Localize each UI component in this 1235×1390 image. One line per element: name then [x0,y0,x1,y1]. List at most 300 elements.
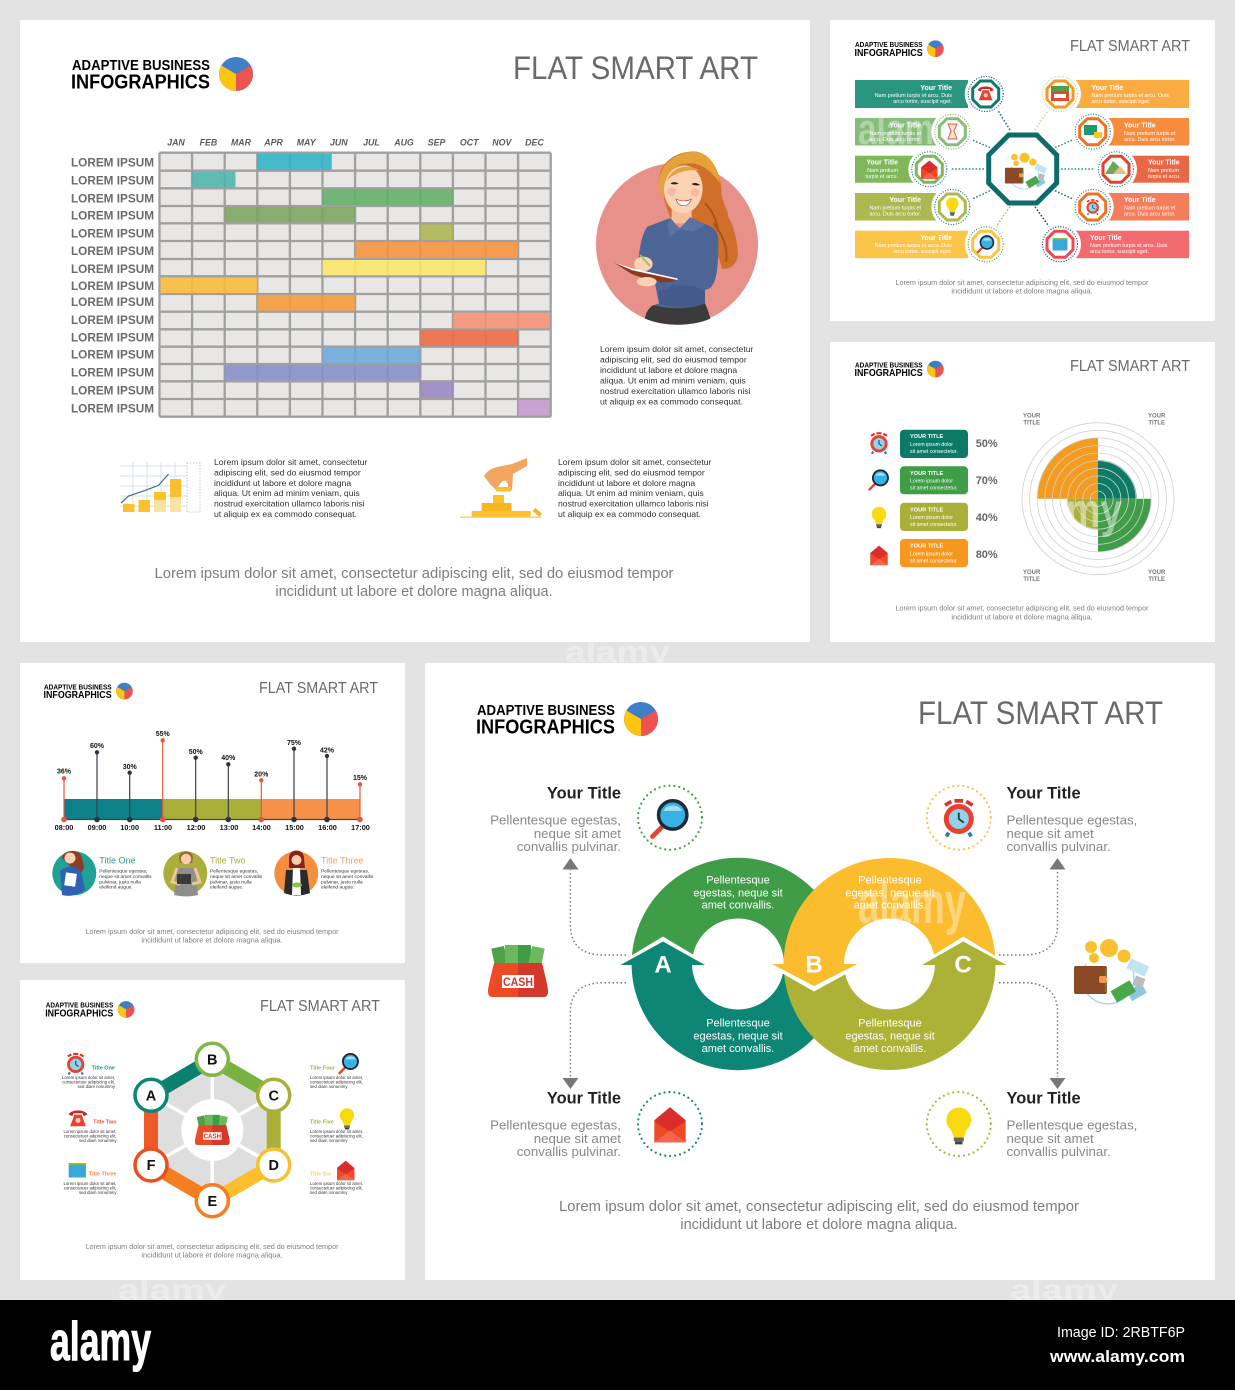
footer text: incididunt ut labore et dolore magna aliqua. [680,1217,958,1233]
bar labels left: Nam pretium turpis et [869,206,921,212]
top right callout: neque sit amet [1006,826,1094,841]
radial labels: YOUR [1023,414,1041,420]
text block: coins paragraph: ut aliquip ex ea commodo consequat. [558,509,701,519]
panel: timeline slide [20,663,405,963]
text block: chart paragraph: nostrud exercitation ullamco laboris nisi [214,498,365,508]
ring text: amet convallis. [854,1043,926,1055]
node letters: B [207,1052,218,1068]
person two text: Pellentesque egestas, [210,868,258,874]
percentages: 70% [976,475,998,487]
text block: right paragraph: incididunt ut labore et dolore magna [600,365,737,375]
title bars right [1076,80,1189,258]
ring text: egestas, neque sit [845,887,935,899]
heading: FLAT SMART ART [259,680,378,697]
bar labels right: arcu tortor, suscipit eget. [1092,99,1150,105]
top right callout [1006,784,1137,854]
bottom right callout: neque sit amet [1006,1131,1094,1146]
right column text: sed diam nonummy [310,1190,348,1195]
left column text: sed diam nonummy [79,1138,117,1143]
text block: coins paragraph: Lorem ipsum dolor sit amet, consectetur [558,457,712,467]
text block: right paragraph: Lorem ipsum dolor sit amet, consectetur [600,344,754,354]
ring text: amet convallis. [702,900,774,912]
radial labels: TITLE [1023,577,1040,583]
text block: coins paragraph: incididunt ut labore et dolore magna [558,478,695,488]
bar labels left: arcu tortor, suscipit eget. [893,99,952,105]
text block: coins paragraph: aliqua. Ut enim ad minim veniam, quis [558,488,704,498]
time labels: 09:00 [88,823,106,832]
logo [45,1001,134,1020]
percent labels: 36% [57,768,72,776]
bottom left callout: convallis pulvinar. [517,1144,621,1159]
background watermarks: alamy [565,636,670,669]
arrow letters: B [805,952,823,978]
website: www.alamy.com [1049,1347,1185,1366]
left column text: Lorem ipsum dolor sit amet, [63,1129,116,1134]
text block: right paragraph [600,344,754,406]
bar labels right: Your Title [1090,235,1122,242]
left column text: sed diam nonummy [78,1084,116,1089]
top right callout: Pellentesque egestas, [1006,812,1137,828]
right column icons [337,1054,358,1180]
month labels: MAY [297,138,317,148]
bottom right callout: convallis pulvinar. [1006,1144,1111,1159]
bar labels right: Nam pretium turpis et [1124,131,1176,137]
ring text: amet convallis. [854,900,926,912]
percent labels: 42% [320,748,335,754]
illustration: woman with notebook [596,151,758,325]
legend text: YOUR TITLE [910,434,944,440]
gantt grid [160,153,551,417]
person three text: Title Three [321,855,364,865]
right column text: Title Five [310,1120,334,1126]
row labels: LOREM IPSUM [71,226,154,240]
month labels: JAN [167,138,185,148]
text block: right paragraph: aliqua. Ut enim ad minim veniam, quis [600,376,746,386]
legend text: sit amet consectetur. [910,558,958,564]
left column text: Title Two [93,1120,117,1126]
row labels: LOREM IPSUM [71,279,154,293]
bar labels right: arcu. Duis arcu tortor. [1124,137,1176,143]
top left callout: convallis pulvinar. [517,839,621,854]
logo: ADAPTIVE BUSINESS [477,702,615,719]
month labels: OCT [460,138,479,148]
time labels: 12:00 [187,823,205,832]
bar labels left: arcu. Duis arcu tortor. [869,137,921,143]
footer text [86,927,339,944]
footer text [154,566,674,600]
footer text [896,278,1149,296]
text block: chart paragraph: adipiscing elit, sed do eiusmod tempor [214,467,361,477]
time labels [55,823,370,832]
background watermarks: alamy [1010,1274,1118,1307]
percent labels: 30% [123,764,137,771]
node letters: F [147,1158,156,1174]
text block: chart paragraph: incididunt ut labore et dolore magna [214,478,351,488]
percent labels: 20% [254,772,269,778]
bar labels left: Your Title [889,122,921,130]
bar labels right: Nam pretium turpis et [1124,206,1176,212]
footer text: incididunt ut labore et dolore magna aliqua. [275,584,553,600]
radial labels [1023,414,1166,583]
logo [855,360,944,379]
logo: INFOGRAPHICS [44,690,112,701]
node icons left [908,73,1007,265]
time labels: 10:00 [120,823,139,832]
panel: hexagon slide [20,980,405,1280]
bar labels right: Your Title [1124,197,1156,204]
person one text: Pellentesque egestas, [99,868,147,874]
panel: Gantt chart slide [20,20,810,642]
ring text: egestas, neque sit [693,887,783,899]
right column text: Lorem ipsum dolor sit amet, [310,1181,363,1186]
top left callout: Your Title [547,784,621,802]
bar labels left: turpis et arcu. [865,174,898,180]
arrow letters: C [954,952,972,978]
month labels: FEB [200,138,218,148]
radial labels: YOUR [1023,570,1041,576]
person three text: Pellentesque egestas, [321,868,369,874]
top right callout: Your Title [1006,784,1081,802]
alamy logo: alamy [50,1310,151,1372]
percentages: 40% [976,512,998,524]
footer text: Lorem ipsum dolor sit amet, consectetur adipiscing elit, sed do eiusmod tempor [559,1199,1079,1215]
month labels: NOV [492,138,512,148]
right column text: consectetuer adipiscing elit, [310,1134,363,1138]
footer text: Lorem ipsum dolor sit amet, consectetur adipiscing elit, sed do eiusmod tempor [86,927,339,936]
row labels: LOREM IPSUM [71,173,154,187]
row labels: LOREM IPSUM [71,402,154,416]
radial chart [1022,423,1174,575]
footer band [0,1300,1235,1390]
person two text: neque sit amet convallis [210,874,263,880]
ring text: egestas, neque sit [845,1031,935,1043]
time labels: 11:00 [154,823,172,832]
legend text: sit amet consectetur. [910,449,958,455]
footer text: Lorem ipsum dolor sit amet, consectetur adipiscing elit, sed do eiusmod tempor [896,604,1149,612]
person one text [99,855,152,890]
panel: hub and spoke slide [830,20,1215,321]
heading: FLAT SMART ART [260,998,380,1015]
percent labels: 15% [353,775,368,782]
bar labels right: turpis et arcu. [1148,174,1181,180]
bottom left callout: Your Title [547,1090,621,1108]
row labels: LOREM IPSUM [71,366,154,380]
footer text: incididunt ut labore et dolore magna aliqua. [951,612,1093,622]
footer text: Lorem ipsum dolor sit amet, consectetur adipiscing elit, sed do eiusmod tempor [86,1242,339,1251]
logo: INFOGRAPHICS [476,716,615,738]
bar labels left: Your Title [889,197,921,204]
logo: ADAPTIVE BUSINESS [46,1001,113,1010]
background watermarks: alamy [118,1274,226,1307]
node letters: A [146,1088,157,1104]
month labels: JUL [363,138,380,148]
bar labels right [1090,85,1181,255]
person two text: Title Two [210,855,246,865]
time labels: 08:00 [55,823,73,832]
icon: envelope in dotted circle [638,1092,702,1156]
row labels [71,156,154,416]
icon: cash bag: CASH [503,975,533,989]
logo [71,57,253,94]
logo: INFOGRAPHICS [45,1009,114,1020]
percent labels: 60% [90,743,105,750]
month labels: SEP [428,138,446,148]
left column text: Title Three [89,1172,116,1178]
bottom right callout [1006,1090,1137,1159]
time labels: 15:00 [285,823,304,832]
legend text: Lorem ipsum dolor [910,515,953,521]
bar labels left: Your Title [866,160,898,166]
ring text [693,874,935,1055]
logo: INFOGRAPHICS [855,48,923,59]
heading: FLAT SMART ART [1070,358,1190,375]
bar labels left: Nam pretium turpis et [869,131,921,137]
bottom left callout [490,1090,621,1159]
legend text: YOUR TITLE [910,544,944,550]
left column text: sed diam nonummy [79,1190,117,1195]
logo: ADAPTIVE BUSINESS [72,57,210,74]
person two text [210,855,263,890]
person two text: eleifend augue. [210,884,243,890]
person one text: eleifend augue. [99,884,133,890]
person three text [321,855,374,890]
percentages [976,438,998,561]
bar labels left [865,85,952,255]
icon: hand placing coins [460,458,542,518]
ring text: Pellentesque [858,874,922,886]
logo [855,40,944,59]
connector lines [950,109,1096,228]
bottom right callout: Pellentesque egestas, [1006,1118,1137,1132]
background watermarks [118,636,1118,1307]
month labels: JUN [330,138,348,148]
footer text [86,1242,339,1260]
radial labels: TITLE [1148,577,1165,583]
icon: magnifier in dotted circle [638,786,702,850]
person three text: neque sit amet convallis [321,874,374,880]
bar labels right: Your Title [1092,85,1123,92]
icon: cash bag [195,1115,230,1145]
right column text: Title Six [310,1172,332,1178]
person one text: Title One [99,855,135,865]
percent labels: 75% [287,740,302,747]
bar labels left: Nam pretium [867,168,899,174]
top left callout [490,784,621,854]
node letters: E [207,1194,217,1210]
icon: cash bag: CASH [204,1134,221,1141]
row labels: LOREM IPSUM [71,384,154,398]
footer text [559,1199,1079,1233]
watermark: alam [858,105,934,154]
left column text [62,1066,117,1195]
bottom right callout: Your Title [1006,1090,1081,1108]
bar labels right: arcu. Duis arcu tortor. [1124,212,1176,218]
right column text [310,1066,363,1195]
image id: Image ID: 2RBTF6P [1057,1324,1185,1341]
row labels: LOREM IPSUM [71,208,154,222]
right column text: Title Four [310,1066,336,1072]
radial labels: YOUR [1148,414,1166,420]
legend boxes [900,430,968,567]
legend text: YOUR TITLE [910,507,944,513]
left column text: Lorem ipsum dolor sit amet, [63,1181,116,1186]
percent labels: 50% [189,749,203,756]
legend text: Lorem ipsum dolor [910,478,953,484]
row labels: LOREM IPSUM [71,156,154,170]
legend text: sit amet consectetur. [910,522,958,528]
right column text: sed diam nonummy [310,1084,348,1089]
node letters: C [268,1088,279,1104]
right column text: sed diam nonummy [310,1138,348,1143]
bar labels right: Your Title [1124,122,1156,130]
legend text: Lorem ipsum dolor [910,442,953,448]
text block: right paragraph: nostrud exercitation ullamco laboris nisi [600,386,751,396]
logo: ADAPTIVE BUSINESS [855,40,923,49]
icon: wallet with coins [1074,939,1149,1004]
bar labels right: Nam pretium turpis et arcu. Duis [1090,243,1168,249]
person three [274,850,318,896]
month labels: DEC [525,138,544,148]
node letters: D [268,1158,279,1174]
logo: ADAPTIVE BUSINESS [44,682,112,691]
person three text: pulvinar, justo nulla [321,879,363,885]
text block: chart paragraph [214,457,368,519]
text block: chart paragraph: aliqua. Ut enim ad minim veniam, quis [214,488,360,498]
time labels: 16:00 [318,823,337,832]
footer text: incididunt ut labore et dolore magna aliqua. [141,936,283,944]
node icons right [1039,73,1137,265]
footer text [896,604,1149,622]
percent labels: 55% [156,731,170,738]
text block: right paragraph: ut aliquip ex ea commodo consequat. [600,396,743,406]
text block: right paragraph: adipiscing elit, sed do eiusmod tempor [600,354,747,364]
icon: growth bar chart [120,462,200,512]
row labels: LOREM IPSUM [71,331,154,345]
row labels: LOREM IPSUM [71,262,154,276]
left column text: Title One [92,1066,115,1072]
logo: INFOGRAPHICS [71,72,210,94]
row labels: LOREM IPSUM [71,313,154,327]
percent labels: 40% [221,755,236,762]
time labels: 17:00 [351,823,370,832]
footer text: incididunt ut labore et dolore magna aliqua. [951,286,1093,296]
left column text: Lorem ipsum dolor sit amet, [62,1075,115,1080]
ring text: Pellentesque [706,1018,770,1030]
text block: coins paragraph [558,457,712,519]
bar labels left: arcu. Duis arcu tortor. [869,212,921,218]
timeline bars [64,799,360,820]
watermark: alamy [858,871,966,936]
legend text [910,434,958,564]
logo: INFOGRAPHICS [855,368,923,379]
icon: clock in dotted circle [927,786,991,850]
bottom left callout: Pellentesque egestas, [490,1118,621,1132]
text block: coins paragraph: adipiscing elit, sed do eiusmod tempor [558,467,705,477]
dotted arrows [562,858,1066,1089]
left column text: consectetuer adipiscing elit, [64,1186,116,1190]
right column text: Lorem ipsum dolor sit amet, [310,1075,363,1080]
ring text: Pellentesque [858,1018,922,1030]
text block: chart paragraph: Lorem ipsum dolor sit amet, consectetur [214,457,368,467]
month labels: AUG [393,138,414,148]
logo [476,702,658,738]
month labels: APR [263,138,284,148]
footer text: incididunt ut labore et dolore magna aliqua. [141,1250,283,1260]
gantt bars [160,154,550,416]
bar labels right: Nam pretium turpis et arcu. Duis [1092,93,1169,99]
time labels: 13:00 [220,823,238,832]
legend text: YOUR TITLE [910,471,944,477]
bar labels left: Nam pretium turpis et arcu. Duis [875,243,952,249]
right column text: consectetuer adipiscing elit, [310,1080,363,1084]
top left callout: neque sit amet [534,826,621,841]
month labels [167,138,544,148]
left column text: consectetuer adipiscing elit, [62,1080,115,1084]
ring text: egestas, neque sit [693,1031,783,1043]
node letters [146,1052,279,1210]
person one text: neque sit amet convallis [99,874,152,880]
top right callout: convallis pulvinar. [1006,839,1111,854]
bar labels right: Nam pretium [1148,168,1179,174]
bar labels left: Your Title [920,235,952,242]
text block: coins paragraph: nostrud exercitation ullamco laboris nisi [558,498,709,508]
bar labels right: arcu tortor, suscipit eget. [1090,249,1149,255]
right column text: Lorem ipsum dolor sit amet, [310,1129,363,1134]
person three text: eleifend augue. [321,884,354,890]
title bars left [855,80,968,258]
footer text: Lorem ipsum dolor sit amet, consectetur adipiscing elit, sed do eiusmod tempor [154,566,674,582]
percentages: 80% [976,549,998,561]
ring diagram [614,858,1012,1070]
bar labels left: Your Title [920,85,952,92]
bar labels right: Your Title [1148,160,1180,166]
ring text: amet convallis. [702,1043,774,1055]
bottom left callout: neque sit amet [534,1131,621,1146]
radial labels: TITLE [1148,420,1165,426]
panel: radial chart slide [830,342,1215,642]
month labels: MAR [231,138,252,148]
hexagon nodes [135,1043,290,1217]
top left callout: Pellentesque egestas, [490,812,621,828]
radial chart: my [1066,485,1122,538]
percent labels [57,731,368,782]
logo: ADAPTIVE BUSINESS [855,360,923,369]
icon: bulb in dotted circle [927,1092,991,1156]
heading: FLAT SMART ART [513,50,758,86]
row labels: LOREM IPSUM [71,191,154,205]
timeline dots [61,738,363,822]
radial labels: TITLE [1023,420,1040,426]
ring text: Pellentesque [706,874,770,886]
heading: FLAT SMART ART [918,695,1163,731]
person one [52,851,96,896]
left column text: consectetuer adipiscing elit, [64,1134,116,1138]
person two text: pulvinar, justo nulla [210,879,252,885]
row labels: LOREM IPSUM [71,244,154,258]
percentages: 50% [976,438,998,450]
legend text: Lorem ipsum dolor [910,552,953,558]
footer text: Lorem ipsum dolor sit amet, consectetur adipiscing elit, sed do eiusmod tempor [896,278,1149,287]
row labels: LOREM IPSUM [71,348,154,362]
text block: chart paragraph: ut aliquip ex ea commodo consequat. [214,509,357,519]
left column icons [67,1053,87,1178]
radial labels: YOUR [1148,570,1166,576]
panel: interlocked rings slide [425,663,1215,1280]
bar labels left: Nam pretium turpis et arcu. Duis [875,93,952,99]
bar labels left: arcu tortor, suscipit eget. [893,249,952,255]
logo [44,682,133,701]
hexagon diagram [151,1059,274,1201]
